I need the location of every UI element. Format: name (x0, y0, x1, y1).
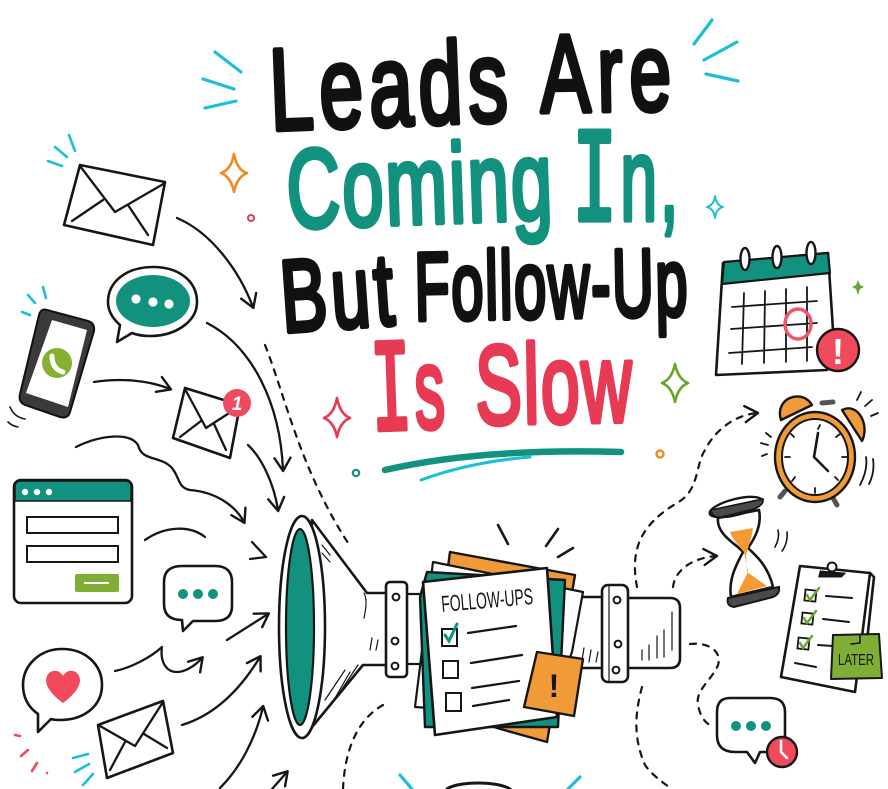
title line: Coming In, (284, 108, 678, 261)
icon: chat bubble with clock (717, 698, 797, 767)
icon: teal chat bubble (108, 267, 197, 342)
icon: web form (14, 480, 132, 603)
dashed paths to delay icons (343, 413, 757, 789)
title line: Coming In,: In, (572, 108, 678, 261)
icon: envelope with badge: 1 (232, 394, 242, 415)
icon: hourglass (708, 493, 787, 607)
icon: envelope top (48, 135, 165, 245)
title line: Leads Are (267, 10, 672, 156)
title (267, 10, 688, 470)
heading: FOLLOW-UPS: FOLLOW-UPS (440, 583, 534, 617)
title line: But Follow-Up: Follow-Up (413, 228, 688, 341)
warning note (524, 652, 583, 716)
follow-ups document stack (415, 525, 583, 742)
title line: Is Slow: Slow (474, 320, 633, 448)
icon: white chat bubble (164, 566, 232, 631)
title line: Is Slow: Is (368, 317, 447, 470)
icon: heart bubble (15, 649, 102, 785)
icon: clipboard with later note (781, 562, 882, 692)
icon: calendar: ! (832, 331, 844, 372)
icon: clipboard with later note: LATER (838, 652, 874, 669)
pipe right (570, 585, 680, 682)
icon: smartphone (8, 287, 94, 427)
bottom cropped elements (400, 775, 580, 789)
title line: Leads Are: Leads (267, 17, 510, 156)
sparkle accents (203, 20, 864, 476)
title line: But Follow-Up: But (277, 233, 397, 354)
title line: Is Slow (368, 317, 633, 470)
icon: alarm clock (761, 392, 878, 505)
pipe clamp left (386, 582, 407, 677)
icon: envelope bottom (98, 701, 173, 778)
warning note: ! (549, 668, 559, 704)
title underline swoosh (385, 451, 621, 480)
icon: envelope with badge (173, 388, 251, 458)
title line: Leads Are: Are (539, 10, 672, 135)
title line: But Follow-Up (277, 228, 688, 354)
checklist (442, 624, 522, 711)
title line: Coming In,: Coming (284, 118, 554, 253)
icon: calendar (716, 242, 859, 375)
arrows into funnel (76, 218, 350, 789)
funnel (279, 516, 680, 738)
